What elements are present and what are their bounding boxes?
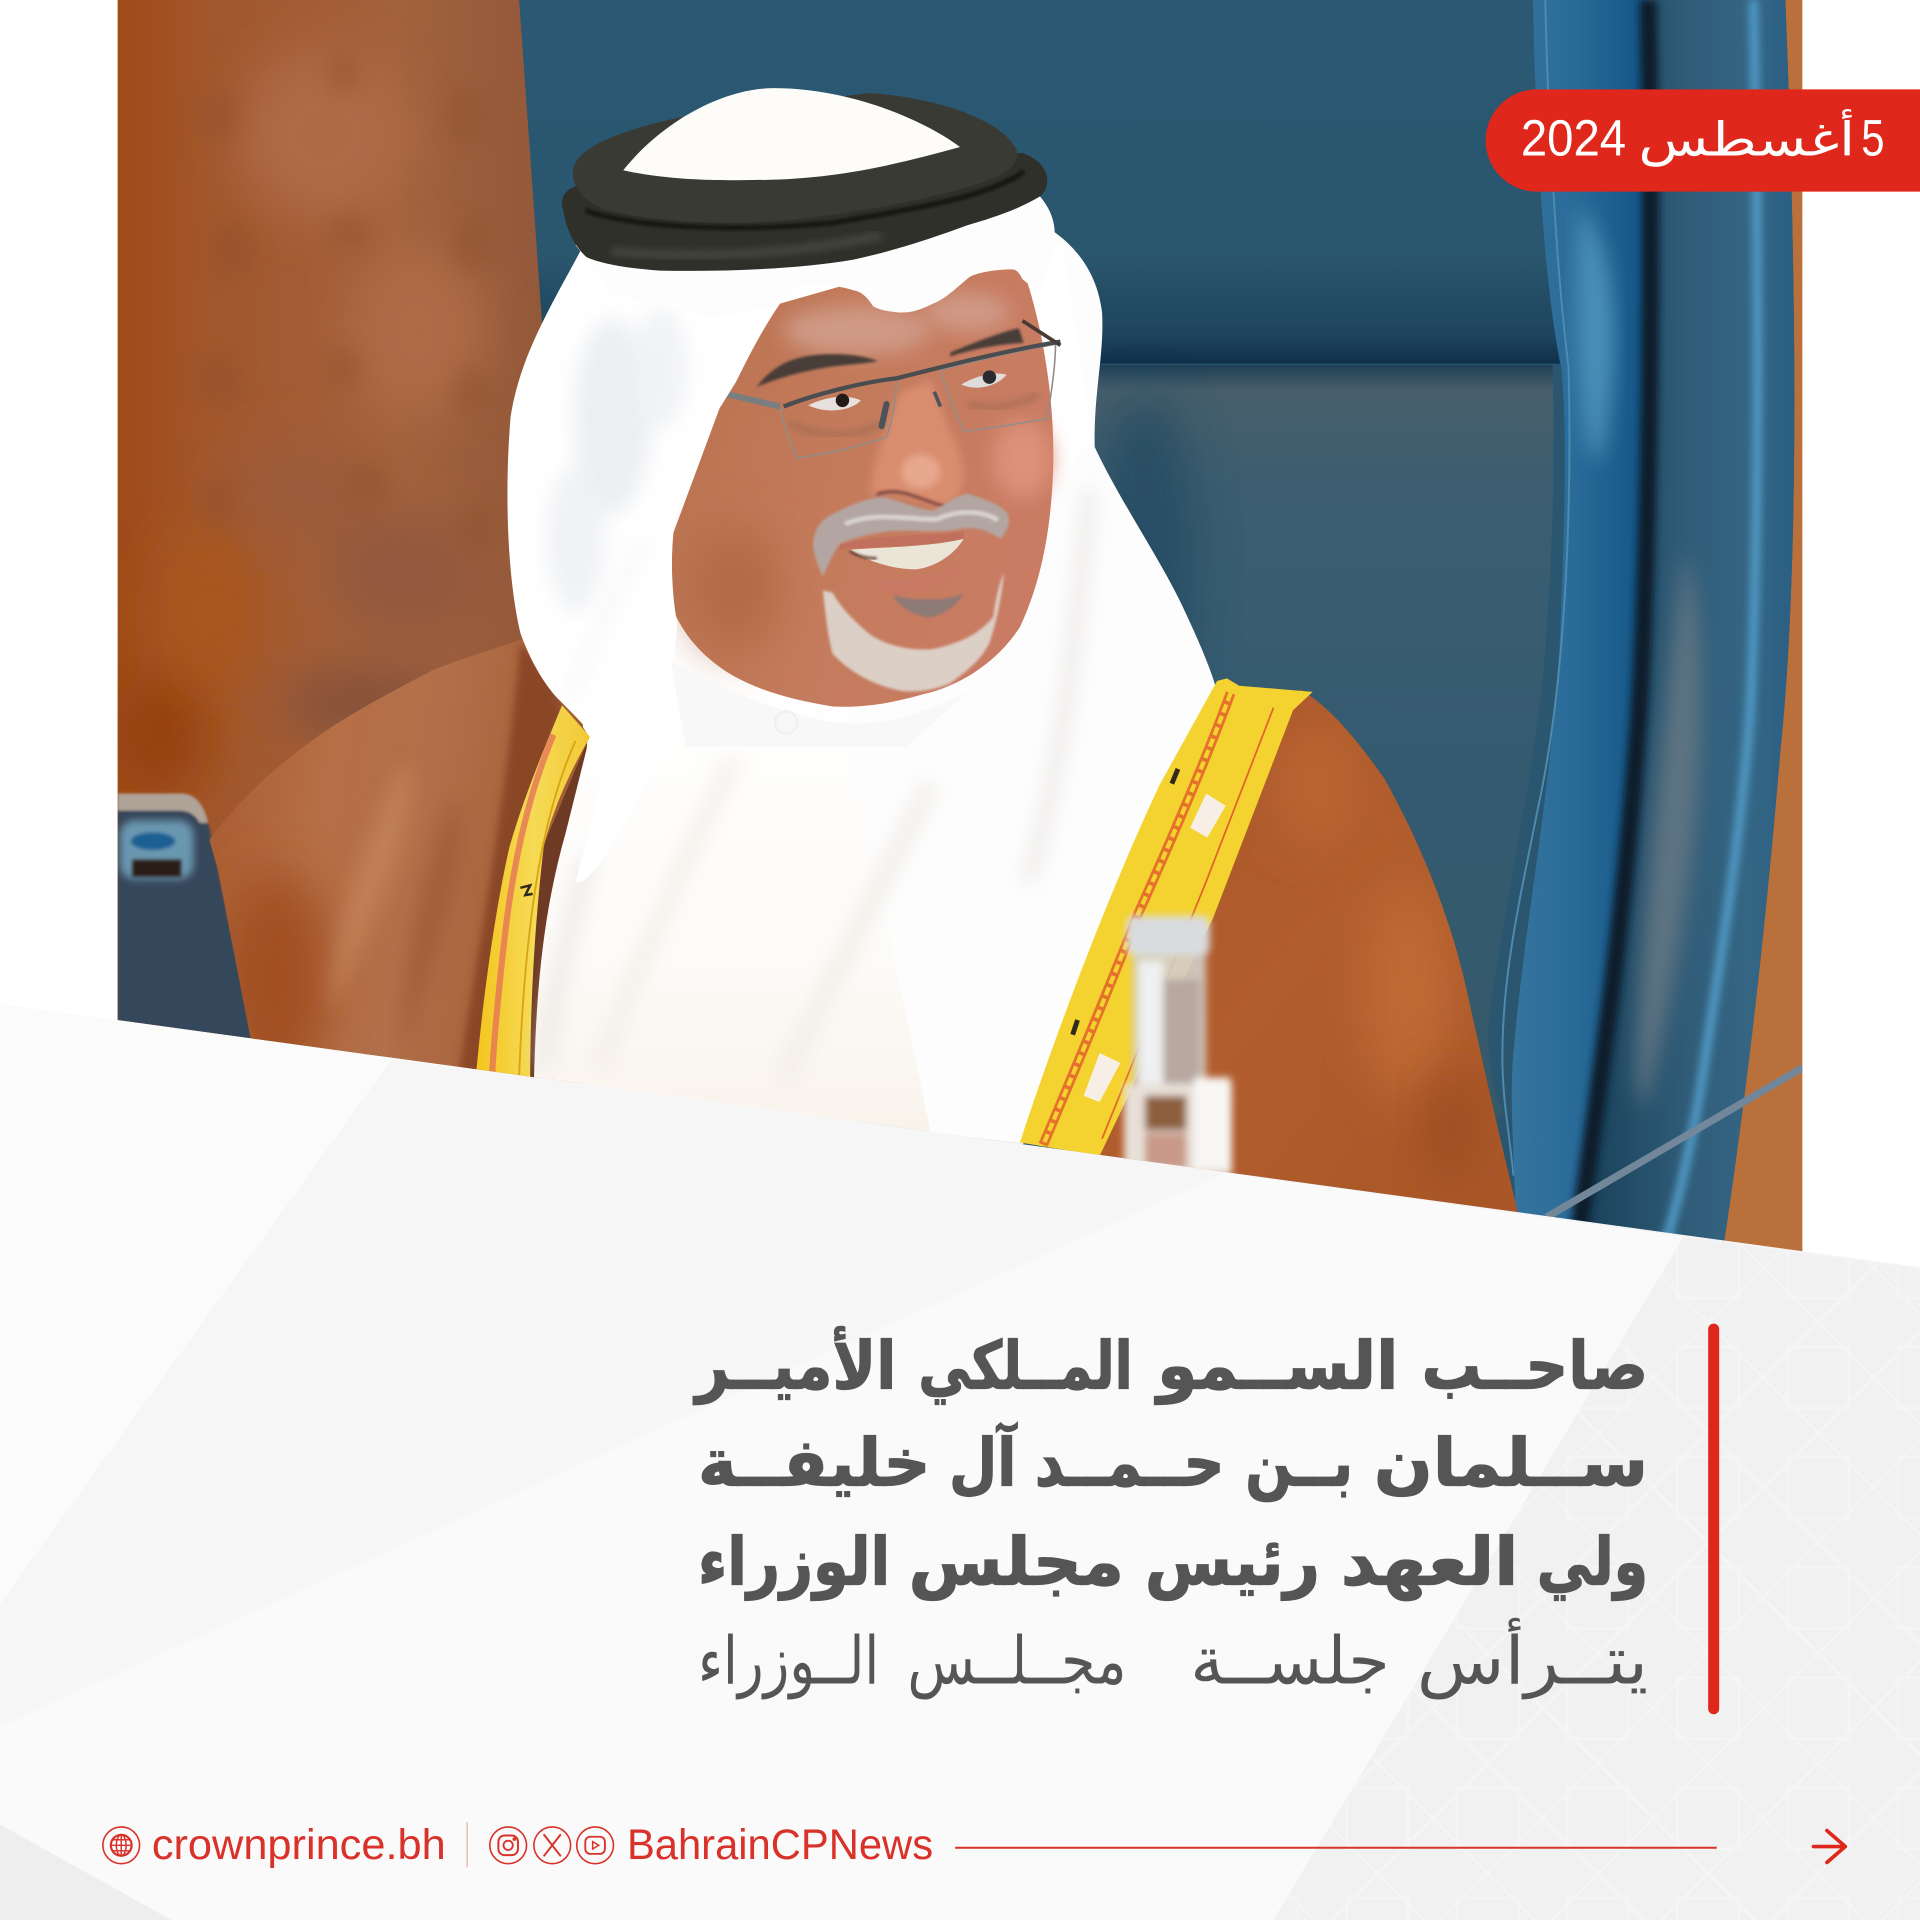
date year: 2024	[1521, 109, 1626, 167]
website text: crownprince.bh	[152, 1821, 446, 1869]
chair side roll	[1512, 0, 1647, 1243]
nose	[871, 380, 964, 507]
headline line 4: جلســة	[1190, 1623, 1390, 1700]
inner dark lining	[520, 735, 590, 1078]
headline line 2: حــمــد	[1035, 1424, 1224, 1501]
wood wall background	[118, 0, 583, 1084]
bottom panel background	[0, 1004, 1920, 1920]
headdress brow band	[576, 196, 1055, 318]
icon: X	[534, 1827, 571, 1864]
headline line 4: الــوزراء	[698, 1623, 879, 1700]
icon: youtube	[577, 1827, 613, 1864]
chair groove	[1577, 0, 1651, 1243]
headline line 3: رئيس	[1145, 1523, 1320, 1600]
icon: globe	[103, 1827, 140, 1864]
headline line 1: الأميــر	[693, 1326, 896, 1406]
headline line 3: العهد	[1341, 1523, 1518, 1601]
headline line 1: الســمو	[1154, 1328, 1398, 1406]
white cap	[623, 88, 960, 180]
mustache	[813, 493, 1009, 577]
tablet device	[118, 793, 253, 1041]
headline line 1: صاحــب	[1422, 1328, 1648, 1405]
agal headband	[562, 88, 1047, 271]
footer line	[955, 1847, 1717, 1849]
date badge	[1486, 89, 1920, 192]
drape shadow folds	[545, 490, 1090, 1078]
mouth	[850, 539, 964, 569]
accent bar	[1708, 1324, 1719, 1714]
headline line 1: المــلكي	[918, 1328, 1133, 1405]
date month: أغسطس	[1638, 109, 1855, 167]
headline line 2	[698, 1421, 1648, 1502]
headline line 4: مجــلــس	[907, 1623, 1127, 1700]
right wall strip	[1724, 0, 1802, 1252]
headline line 4	[698, 1618, 1648, 1700]
chair outer panel	[1580, 0, 1794, 1243]
white tunic	[534, 705, 1024, 1144]
cable	[1547, 1068, 1802, 1217]
footer	[103, 1821, 1845, 1869]
headline line 2: ســلمان	[1374, 1424, 1648, 1501]
divider	[466, 1822, 468, 1867]
icon: arrow	[1813, 1831, 1845, 1862]
icon: instagram	[490, 1827, 527, 1864]
face	[672, 251, 1053, 707]
chair highlight	[1665, 0, 1758, 1243]
social handle text: BahrainCPNews	[627, 1821, 933, 1869]
headline line 3: الوزراء	[698, 1523, 890, 1601]
headline line 3	[698, 1523, 1648, 1601]
left gold trim	[476, 705, 590, 1078]
right robe	[1090, 690, 1518, 1212]
headline line 3: مجلس	[909, 1523, 1124, 1600]
headline line 1	[693, 1326, 1648, 1406]
headline line 4: يتــرأس	[1417, 1618, 1648, 1700]
headdress backing	[690, 283, 1054, 470]
left robe	[210, 639, 588, 1078]
headline text	[693, 1326, 1648, 1700]
geometric facets	[0, 1004, 392, 1604]
chair lower cushion	[1078, 365, 1554, 1224]
headline line 3: ولي	[1537, 1523, 1648, 1601]
headline line 2: بــن	[1245, 1424, 1353, 1502]
blue chair	[519, 0, 1794, 1243]
eyes	[808, 397, 861, 410]
headline line 2: آل	[949, 1421, 1017, 1501]
photo: Crown Prince seated in blue chair	[110, 0, 1802, 1261]
upper lip	[840, 531, 964, 550]
chair piping	[1502, 0, 1569, 1176]
chair upper cushion	[519, 0, 1564, 364]
goatee	[823, 573, 1004, 691]
soul patch	[893, 594, 964, 617]
right gold trim	[1020, 678, 1313, 1156]
white headdress left drape	[507, 233, 967, 883]
headline line 2: خليفــة	[698, 1424, 931, 1501]
right headdress drape	[903, 232, 1215, 1144]
eyebrows	[757, 354, 878, 387]
date day: 5	[1861, 109, 1884, 167]
water bottle	[1124, 916, 1232, 1176]
glasses	[727, 321, 1060, 458]
